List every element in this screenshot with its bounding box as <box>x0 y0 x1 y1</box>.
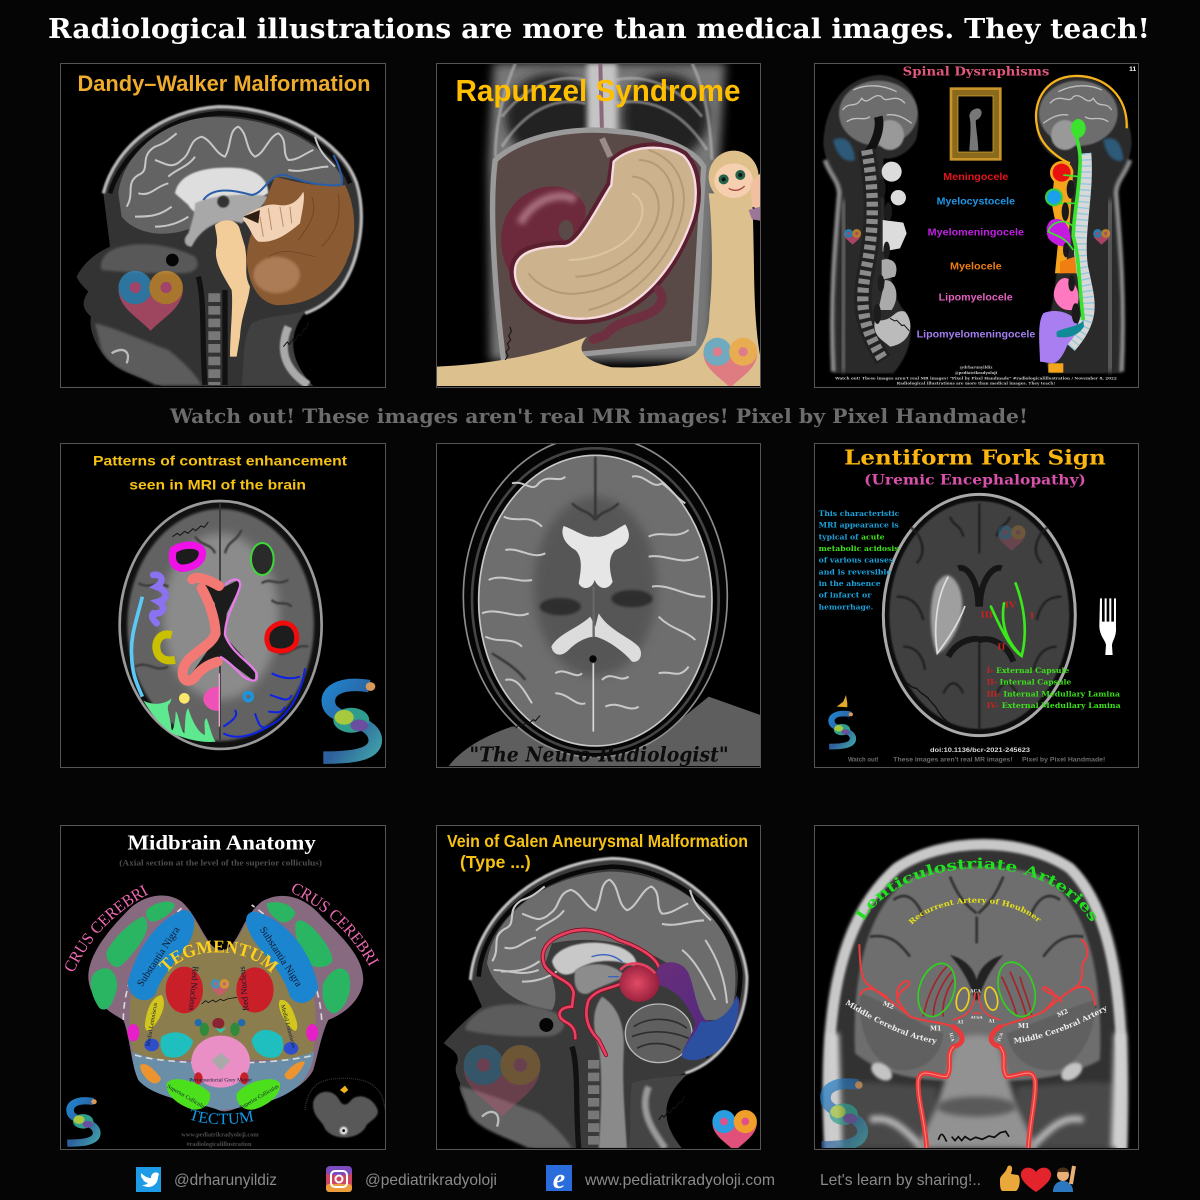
Rapunzel figure <box>709 151 760 221</box>
left hyperintense lesion <box>931 575 962 653</box>
magenta ring <box>172 545 202 568</box>
icon: S logo with hand <box>829 695 853 747</box>
twitter handle: @drharunyildiz <box>174 1172 277 1189</box>
blue leptomeningeal <box>131 597 142 697</box>
central nuclei <box>195 1018 245 1036</box>
fork roman labels <box>981 601 1034 652</box>
signature <box>283 322 309 347</box>
legend: I- External Capsule <box>987 666 1069 675</box>
left sagittal figure <box>823 75 919 373</box>
ventricle <box>175 168 268 212</box>
structure labels: Substantia Nigra <box>135 925 183 989</box>
red ring <box>267 623 297 651</box>
description: MRI appearance is <box>819 521 899 530</box>
MCA labels: A1 <box>956 1020 964 1025</box>
axial brain <box>120 501 322 749</box>
blue line <box>203 155 342 200</box>
aneurysm <box>619 962 739 1060</box>
MCA labels: M1 <box>1018 1023 1029 1030</box>
heading: Patterns of contrast enhancement <box>93 452 347 468</box>
abdomen cavity <box>493 130 704 362</box>
inset MRI <box>305 1078 385 1137</box>
cyst <box>247 177 354 305</box>
septum and eyes <box>540 587 653 663</box>
vessels <box>543 930 659 1055</box>
cerebrum <box>487 872 735 1020</box>
fork roman labels: II <box>997 642 1005 652</box>
legend <box>987 666 1121 710</box>
signature <box>905 682 949 723</box>
green ring <box>251 543 274 575</box>
superior colliculi <box>167 1079 210 1110</box>
left lesions <box>874 162 910 347</box>
footnote: These images aren't real MR images! <box>893 757 1013 763</box>
labels: Lipomyelocele <box>939 293 1013 304</box>
icon: S logo <box>821 1081 863 1146</box>
icon: watermark heart <box>211 979 229 996</box>
signature <box>515 716 540 728</box>
description: of various causes <box>819 556 893 565</box>
MCA labels: ACoA <box>970 1015 984 1020</box>
closing message: Let's learn by sharing!.. <box>820 1172 981 1189</box>
right vertebral column <box>1070 153 1088 347</box>
tectum <box>132 1052 314 1110</box>
heading <box>93 452 347 492</box>
web credit: #radiologicalillustration <box>186 1141 252 1148</box>
skull rings <box>463 436 727 757</box>
icon: twitter <box>136 1167 161 1192</box>
pink ventricular lining <box>220 580 257 681</box>
signature <box>172 522 208 537</box>
structure labels: Red Nucleus <box>187 966 201 1012</box>
description: and is reversible <box>819 567 892 576</box>
icon: person raising hand <box>1053 1166 1074 1192</box>
lilac gyral <box>152 575 166 623</box>
structure labels: Red Nucleus <box>237 965 251 1011</box>
bowel <box>594 290 662 339</box>
signature <box>890 318 909 331</box>
MCA labels <box>845 989 1106 1045</box>
labels: Lipomyelomeningocele <box>917 330 1036 341</box>
panel: Midbrain anatomy <box>65 833 385 1148</box>
scalp rim <box>470 858 747 1073</box>
spleen <box>501 186 586 277</box>
tegmentum label: TEGMENTUM <box>158 940 280 973</box>
blue ring dot <box>244 693 252 701</box>
lesions <box>1050 161 1073 184</box>
panel: Lentiform fork sign <box>814 443 1139 768</box>
midbrain silhouette <box>88 895 363 1111</box>
heading: (Type ...) <box>460 852 531 872</box>
curved title: Lenticulostriate Arteries <box>855 858 1097 922</box>
icon: heart <box>1021 1168 1051 1192</box>
crus cerebri labels: CRUS CEREBRI <box>65 884 148 972</box>
icon: S logo <box>67 1099 97 1143</box>
labels: Meningocele <box>943 172 1009 183</box>
heading: Vein of Galen Aneurysmal Malformation <box>447 831 748 851</box>
panel: Lenticulostriate arteries <box>820 837 1130 1148</box>
structure labels: Superior Colliculus <box>166 1084 207 1111</box>
substantia nigra <box>128 910 194 1000</box>
skull base tissue <box>833 1033 1120 1148</box>
description: typical of acute <box>819 532 885 541</box>
tectum label: TECTUM <box>190 1109 254 1124</box>
right sagittal figure <box>1036 75 1132 373</box>
footnote: Pixel by Pixel Handmade! <box>1022 757 1105 763</box>
yellow ellipses <box>954 986 1000 1012</box>
salmon ependymal enhancement <box>183 578 219 681</box>
brainstem <box>594 997 627 1148</box>
MCA labels: A1 <box>988 1020 995 1025</box>
temporal lobes <box>860 993 943 1070</box>
icon: internet explorer <box>546 1164 572 1195</box>
signature <box>505 327 511 360</box>
oesophagus <box>602 138 610 157</box>
legend: IV- External Medullary Lamina <box>987 701 1121 710</box>
gold frame <box>950 87 1002 161</box>
corpus callosum <box>552 943 636 975</box>
labels: Myelocele <box>950 262 1002 273</box>
blue sulcal <box>223 668 305 737</box>
title: Radiological illustrations are more than medical images. They teach! <box>48 14 1150 45</box>
credits: Radiological illustrations are more than medical images. They teach! <box>897 380 1055 385</box>
ventricles <box>188 580 255 682</box>
shoulders <box>449 697 760 766</box>
panel heading: Spinal Dysraphisms <box>903 64 1049 79</box>
axial brain <box>883 494 1075 736</box>
ventricle <box>950 955 1003 1000</box>
green ellipses <box>912 957 1042 1021</box>
MCA labels: Middle Cerebral Artery <box>1014 1006 1106 1044</box>
structure labels <box>135 925 304 1111</box>
credits: Watch out! These images aren't real MR images! "Pixel by Pixel Handmade" #radiologicalillustration / November 8, 2022 <box>834 375 1117 380</box>
green sulcal <box>143 698 216 742</box>
MCA labels: Middle Cerebral Artery <box>845 1000 937 1045</box>
labels: Myelomeningocele <box>928 228 1024 239</box>
credits: @pediatrikradyoloji <box>955 370 998 375</box>
heading: seen in MRI of the brain <box>129 476 306 492</box>
panel: Rapunzel syndrome <box>435 63 761 388</box>
pink half disc <box>203 687 219 711</box>
icon: thumbs up <box>1000 1166 1020 1191</box>
neck back <box>242 310 312 385</box>
dashed border <box>123 905 322 1063</box>
subheading: (Uremic Encephalopathy) <box>864 472 1086 488</box>
heading: Midbrain Anatomy <box>127 833 317 855</box>
icon: internet explorer: e <box>553 1164 565 1195</box>
structure labels: Periaqueductal Grey Matter <box>189 1078 252 1084</box>
description: in the absence <box>819 579 881 588</box>
structure labels: Medial Lemniscus <box>279 1004 296 1049</box>
subheading: Watch out! These images aren't real MR images! Pixel by Pixel Handmade! <box>169 404 1028 428</box>
footnote: Watch out! <box>848 757 879 763</box>
panel: Spinal dysraphisms <box>814 63 1139 388</box>
icon: watermark heart <box>464 1045 540 1117</box>
legend: II- Internal Capsule <box>987 678 1071 687</box>
head silhouette <box>444 858 747 1148</box>
labels: Myelocystocele <box>937 197 1015 208</box>
legend: III- Internal Medullary Lamina <box>987 689 1120 698</box>
green fork <box>991 583 1025 656</box>
description: hemorrhage. <box>819 602 873 611</box>
credits <box>834 365 1117 385</box>
instagram handle: @pediatrikradyoloji <box>365 1172 497 1189</box>
red nuclei <box>166 967 203 1013</box>
structure labels: Superior Colliculus <box>239 1084 280 1111</box>
panel: Midbrain anatomy: CRUS CEREBRI <box>292 884 379 966</box>
tegmentum <box>130 913 316 1060</box>
panel: Vein of Galen aneurysmal malformation <box>436 825 761 1152</box>
fork roman labels: IV <box>1005 601 1016 611</box>
doi: doi:10.1136/bcr-2021-245623 <box>930 747 1031 754</box>
lateral lemniscus <box>140 1061 305 1084</box>
cerebrum <box>479 455 712 746</box>
footer social bar <box>136 1164 1074 1195</box>
coronal head <box>822 838 1130 1150</box>
signature <box>938 1131 1009 1142</box>
MCA labels: M2 <box>1056 1008 1070 1019</box>
face tissues <box>460 1004 594 1148</box>
brainstem and base <box>917 1035 1037 1148</box>
website: www.pediatrikradyoloji.com <box>584 1172 775 1189</box>
description: This characteristic <box>819 509 900 518</box>
panel: The Neuro-Radiologist <box>436 436 761 768</box>
x-ray torso <box>489 63 725 360</box>
structure labels: Medial Lemniscus <box>146 1002 159 1047</box>
heading <box>447 831 748 872</box>
spinal cord <box>1073 122 1083 320</box>
panel heading: Rapunzel Syndrome <box>456 73 740 108</box>
fork roman labels: III <box>981 611 993 621</box>
face tissues <box>95 244 225 385</box>
thalamus <box>574 964 625 994</box>
description: of infarct or <box>819 591 872 600</box>
description <box>819 509 900 611</box>
web credit <box>181 1132 259 1148</box>
reticular and lemniscus <box>127 995 318 1058</box>
yellow dot <box>179 693 190 704</box>
thalamus <box>185 195 268 247</box>
MCA labels: M1 <box>930 1026 941 1033</box>
signature <box>659 1096 685 1120</box>
labels <box>917 172 1036 341</box>
basal ganglia perforators <box>923 967 1032 1017</box>
page number: 11 <box>1129 66 1136 73</box>
head silhouette <box>77 107 361 386</box>
hair trailing <box>435 193 760 386</box>
MCA labels: ACA <box>969 989 981 995</box>
cerebrum <box>118 117 343 234</box>
caption: "The Neuro-Radiologist" <box>469 743 729 767</box>
panel heading: Dandy–Walker Malformation <box>78 71 370 96</box>
scalp rim <box>103 107 361 313</box>
heading: Lentiform Fork Sign <box>844 446 1106 470</box>
icon: S logo <box>323 682 375 758</box>
periaqueductal grey <box>191 1036 250 1088</box>
icon: watermark heart <box>703 338 757 388</box>
icon: map pin heart <box>712 1110 757 1152</box>
panel: patterns of contrast enhancement <box>60 443 386 768</box>
signature <box>202 997 237 1004</box>
web credit: www.pediatrikradyoloji.com <box>181 1132 259 1139</box>
credits: @drharunyildiz <box>960 365 993 370</box>
description: metabolic acidosis <box>819 544 899 553</box>
stomach with bezoar <box>512 145 699 322</box>
icon: watermark heart <box>998 525 1025 551</box>
neck back <box>629 1073 689 1148</box>
worm remnant <box>243 192 304 242</box>
yellow C <box>156 634 175 660</box>
arteries <box>859 940 1095 1148</box>
structure labels: Substantia Nigra <box>257 925 304 989</box>
icon: instagram <box>326 1166 352 1192</box>
recurrent artery label: Recurrent Artery of Heubner <box>908 898 1041 925</box>
cerebellum <box>625 1004 692 1063</box>
MCA labels: ICA <box>997 1032 1005 1042</box>
MCA labels: M2 <box>882 1000 895 1011</box>
icon: watermark heart <box>118 271 183 331</box>
MCA labels: ICA <box>947 1033 955 1043</box>
panel: Dandy-Walker malformation <box>76 75 370 386</box>
crus tracts <box>91 901 350 1013</box>
footnote <box>848 757 1105 763</box>
icon: fork <box>1099 598 1116 655</box>
brainstem <box>215 220 250 357</box>
subheading: (Axial section at the level of the superior colliculus) <box>119 858 322 867</box>
orange fat band <box>1052 170 1073 273</box>
fork roman labels: I <box>1030 611 1034 621</box>
ventricles <box>551 524 641 662</box>
